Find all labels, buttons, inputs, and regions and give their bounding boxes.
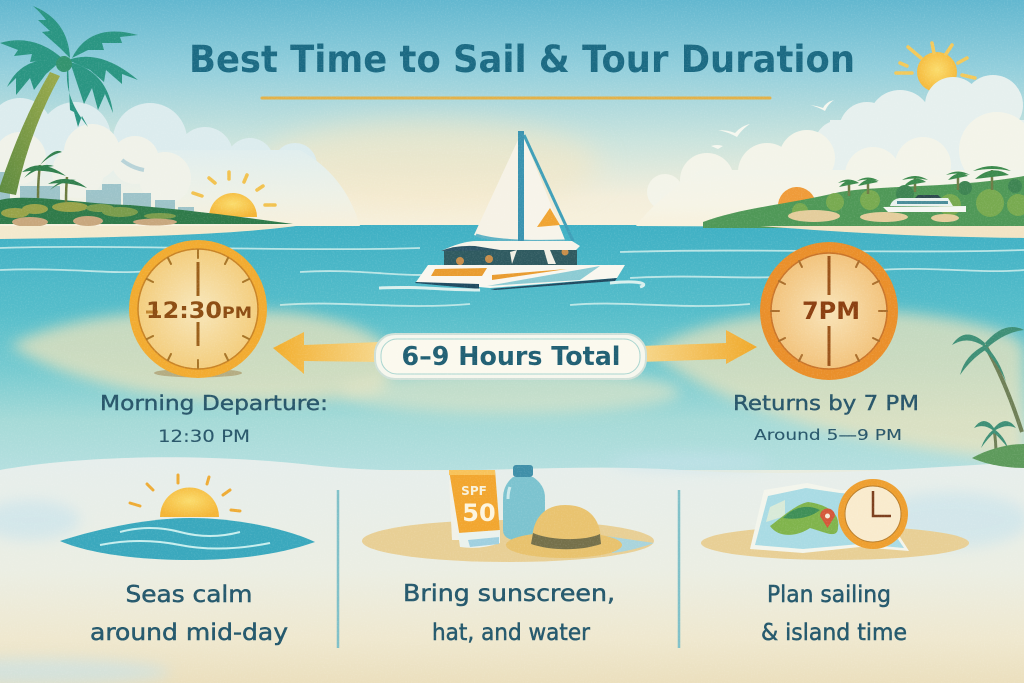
icon: water bottle [503,465,545,540]
divider [338,490,679,648]
right island [703,166,1024,238]
clock label: 7PM [802,297,860,325]
text: Seas calm [126,582,252,608]
title: Best Time to Sail & Tour Duration [189,38,855,81]
icon: distant ferry [883,195,966,212]
right clock [760,242,898,380]
text: hat, and water [432,620,590,646]
icon: large palm top left [0,6,138,195]
background: sea [0,225,1024,470]
arrow right [640,330,757,364]
text [90,582,288,646]
icon: right palm [952,327,1024,468]
sandbar left [10,310,394,402]
birds [711,100,834,149]
text: return: Returns by 7 PM [733,391,919,415]
title underline [262,96,770,100]
small palms right [838,166,1011,196]
panel: plan sailing [701,479,969,646]
duration pill [375,334,646,379]
background: lower beach [0,457,1024,683]
text: around mid-day [90,620,288,646]
text: return [733,391,919,444]
clock label: 12:30 PM [146,299,252,324]
left clouds [0,98,360,226]
sandbar centre [340,370,680,414]
horizon right sun [778,187,816,208]
text [761,582,907,646]
arrow left [273,332,380,374]
sea texture [0,247,1024,306]
left beach [0,226,296,239]
icon: straw hat [506,505,622,558]
icon: sun top right [896,43,975,92]
text [403,581,615,646]
text: & island time [761,620,907,646]
text: return: Around 5—9 PM [754,426,902,444]
icon: sunscreen [449,470,500,548]
panel: bring sunscreen [362,465,654,646]
text: departure [100,391,328,447]
icon: sunscreen: 50 [462,499,496,527]
icon: sunscreen: SPF [461,484,487,498]
small palms left [22,151,87,202]
background: sky [0,0,1024,232]
text: departure: 12:30 PM [158,427,250,447]
icon: small clock [838,479,908,549]
hull [416,265,625,288]
left clock [129,240,267,378]
icon: map [750,483,909,553]
left skyline [0,172,194,213]
duration pill: 6–9 Hours Total [402,342,620,372]
text: Plan sailing [767,582,891,608]
sandbar right [650,311,1024,460]
sand mound [362,520,654,562]
left island [0,198,296,239]
text: Bring sunscreen, [403,581,615,607]
panel: seas calm [60,475,315,646]
icon: catamaran [379,131,644,290]
water patches on beach [0,454,1024,683]
icon: sun over waves [60,475,315,560]
text: departure: Morning Departure: [100,391,328,415]
right clouds [636,75,1024,228]
right beach [760,226,1024,238]
warm glow at horizon [260,120,600,210]
cabin [444,250,577,266]
horizon left sun [193,172,275,217]
